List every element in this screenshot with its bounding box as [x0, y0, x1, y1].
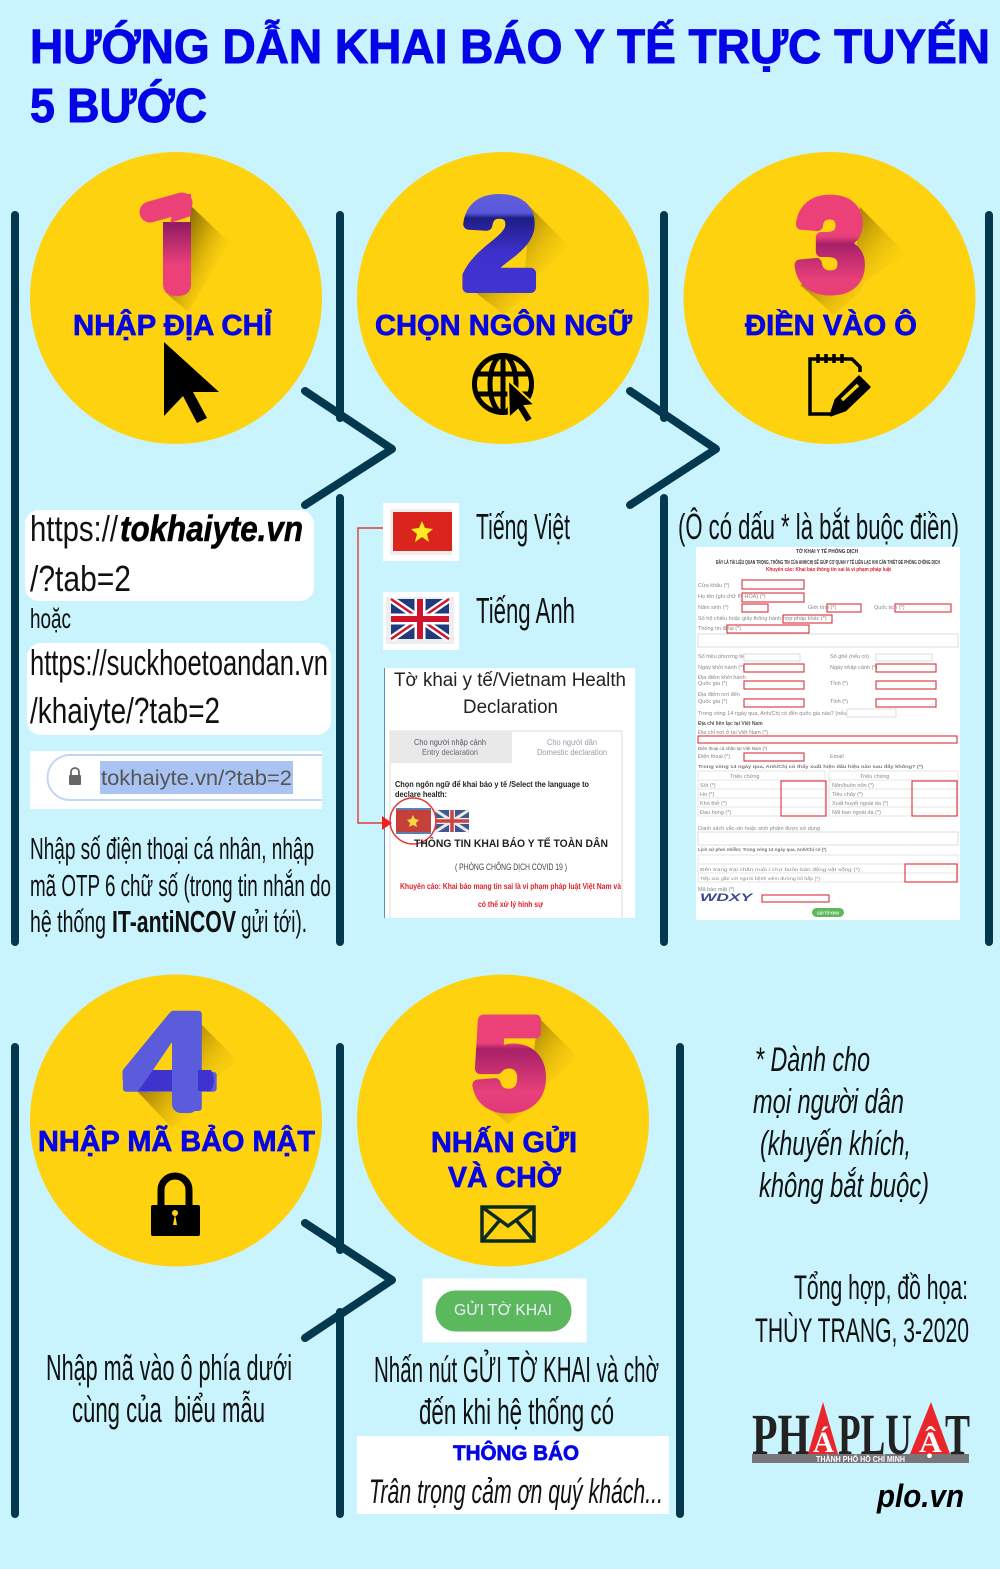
screenshot: language selection: THÔNG TIN KHAI BÁO Y TẾ TOÀN DÂN: [414, 837, 608, 850]
screenshot: language selection: declare health:: [395, 789, 447, 799]
screenshot: declaration form: Giới tính (*): [808, 605, 837, 611]
instruction text: đến khi hệ thống có: [419, 1391, 614, 1432]
step 2 badge: [357, 152, 649, 444]
instruction text: [30, 831, 331, 939]
screenshot: declaration form: Địa chỉ nơi ở tại Việt Nam (*): [698, 729, 768, 736]
screenshot: declaration form: Đau họng (*): [700, 810, 731, 816]
screenshot: declaration form: Năm sinh (*): [698, 605, 729, 611]
screenshot: language selection: Khuyến cáo: Khai báo mang tin sai là vi phạm pháp luật Việt Nam và: [400, 881, 621, 891]
url box 2: [27, 642, 331, 735]
url box 2: /khaiyte/?tab=2: [30, 690, 220, 731]
credit: [755, 1269, 969, 1350]
screenshot: declaration form: [696, 547, 960, 920]
screenshot: declaration form: Trong vòng 14 ngày qua, Anh/Chị có đến quốc gia nào? (nếu có ghi rõ): [698, 711, 871, 717]
screenshot: declaration form: Địa điểm khởi hành: [698, 674, 746, 681]
screenshot: declaration form: Mã bảo mật (*): [698, 887, 735, 893]
instruction text: hệ thống: [30, 904, 106, 939]
screenshot: declaration form: Trong vòng 14 ngày qua, Anh/Chị có thấy xuất hiện dấu hiệu nào sau đây không? (*): [698, 763, 924, 769]
screenshot: declaration form: Điện thoại cá nhân tại Việt Nam (*): [698, 746, 768, 751]
screenshot: declaration form: TỜ KHAI Y TẾ PHÒNG DỊCH: [796, 547, 858, 555]
screenshot: declaration form: Số hiệu phương tiện: [698, 654, 748, 660]
screenshot: declaration form: Ngày khởi hành (*): [698, 664, 744, 671]
icon: padlock: [151, 1176, 200, 1236]
digit 1: [140, 192, 192, 296]
heading: nhập địa chỉ: NHẬP ĐỊA CHỈ: [73, 308, 272, 342]
logo: pháp luật: Á: [813, 1426, 834, 1459]
notice box: THÔNG BÁO: [453, 1441, 579, 1465]
browser address bar: tokhaiyte.vn/?tab=2: [101, 767, 292, 790]
url box 1: /?tab=2: [30, 558, 131, 599]
logo: pháp luật: PLU: [838, 1402, 912, 1467]
screenshot: declaration form: Số ghế (nếu có): [830, 654, 869, 660]
icon: globe with cursor: [474, 356, 535, 423]
button: gửi tờ khai: [422, 1278, 586, 1342]
browser address bar: [30, 751, 322, 809]
instruction text: gửi tới).: [241, 904, 307, 939]
screenshot: declaration form: Tỉnh (*): [830, 698, 848, 705]
screenshot: declaration form: Quốc gia (*): [698, 699, 728, 705]
digit 4: 4: [124, 985, 214, 1138]
screenshot: language selection: Chọn ngôn ngữ để khai báo y tế /Select the language to: [395, 779, 589, 789]
panel: step 2 language choice: [358, 503, 635, 918]
screenshot: declaration form: Email: [830, 754, 844, 760]
instruction text: Nhấn nút GỬI TỜ KHAI và chờ: [374, 1348, 659, 1390]
note: audience: không bắt buộc): [759, 1167, 929, 1205]
label: tiếng việt: Tiếng Việt: [476, 506, 570, 547]
logo: pháp luật: [752, 1402, 970, 1467]
screenshot: declaration form: Cửa khẩu (*): [698, 582, 730, 589]
screenshot: declaration form: Nổi ban ngoài da (*): [832, 809, 881, 816]
step 5 badge: [357, 974, 649, 1266]
panel: step 3 form: [678, 506, 960, 920]
note: audience: * Dành cho: [755, 1041, 870, 1079]
heading: điền vào ô: ĐIỀN VÀO Ô: [745, 308, 917, 342]
screenshot: declaration form: Sốt (*): [700, 783, 716, 789]
digit 2: 2: [464, 174, 536, 314]
instruction text: Nhập số điện thoại cá nhân, nhập: [30, 831, 314, 866]
screenshot: declaration form: Quốc gia (*): [698, 681, 728, 687]
screenshot: declaration form: Khó thở (*): [700, 800, 727, 807]
digit 1: 1: [131, 168, 203, 321]
panel: step 5 instructions: [357, 1278, 669, 1514]
url box 1: tokhaiyte.vn: [120, 508, 303, 549]
notice box: Trân trọng cảm ơn quý khách...: [369, 1473, 663, 1511]
icon: notepad and pencil: [810, 354, 869, 415]
flag: UK: [383, 592, 459, 650]
step 3 badge: [684, 152, 976, 444]
heading: nhấn gửi và chờ: VÀ CHỜ: [448, 1160, 561, 1194]
step 4 badge: [30, 974, 322, 1266]
screenshot: declaration form: Số hộ chiếu hoặc giấy thông hành hợp pháp khác (*): [698, 616, 827, 622]
title: [30, 19, 990, 133]
panel: step 4 instructions: cùng của biểu mẫu: [72, 1389, 265, 1430]
screenshot: declaration form: Điện thoại (*): [698, 754, 730, 760]
note: audience: [753, 1041, 929, 1205]
screenshot: declaration form: Triệu chứng: [730, 774, 759, 780]
panel: step 1 instructions: [25, 508, 331, 939]
logo: pháp luật: PH: [752, 1402, 810, 1467]
screenshot: language selection: Cho người dân: [547, 738, 597, 747]
screenshot: declaration form: Tiêu chảy (*): [832, 792, 863, 798]
screenshot: declaration form: Ho (*): [700, 792, 715, 798]
screenshot: language selection: Tờ khai y tế/Vietnam Health: [394, 670, 626, 691]
screenshot: language selection: Domestic declaration: [537, 748, 607, 757]
screenshot: declaration form: Địa điểm nơi đến: [698, 691, 740, 698]
screenshot: declaration form: Nôn/buồn nôn (*): [832, 783, 874, 789]
logo: pháp luật: T: [945, 1402, 970, 1467]
screenshot: declaration form: Triệu chứng: [860, 774, 889, 780]
screenshot: declaration form: Tỉnh (*): [830, 680, 848, 687]
flag: Vietnam: [383, 503, 459, 561]
icon: cursor: [164, 342, 219, 423]
screenshot: declaration form: Xuất huyết ngoài da (*): [832, 801, 888, 807]
arrow: step 1 to 2: [305, 391, 392, 505]
logo: pháp luật: Ậ: [919, 1426, 942, 1459]
url box 2: https://suckhoetoandan.vn: [30, 642, 328, 683]
instruction text: [374, 1348, 659, 1432]
screenshot: declaration form: Thông tin đi lại (*): [698, 626, 741, 632]
screenshot: language selection: [382, 668, 635, 918]
screenshot: language selection: Declaration: [463, 697, 558, 718]
heading: chọn ngôn ngữ: CHỌN NGÔN NGỮ: [375, 308, 633, 342]
screenshot: declaration form: Ngày nhập cảnh (*): [830, 665, 878, 671]
note: audience: (khuyến khích,: [760, 1125, 911, 1163]
step 1 badge: [30, 152, 322, 444]
heading: nhấn gửi và chờ: NHẤN GỬI: [431, 1125, 577, 1159]
digit 5: 5: [474, 993, 544, 1134]
digit 3: 3: [797, 174, 864, 316]
screenshot: declaration form: Địa chỉ liên lạc tại Việt Nam: [698, 721, 763, 727]
button: gửi tờ khai: GỬI TỜ KHAI: [454, 1301, 552, 1319]
icon: envelope: [482, 1207, 534, 1241]
screenshot: declaration form: Họ tên (ghi chữ IN HOA) (*): [698, 594, 766, 600]
label: hoặc: hoặc: [30, 603, 71, 634]
screenshot: declaration form: Lịch sử phơi nhiễm: Trong vòng 14 ngày qua, Anh/Chị có (*): [698, 846, 827, 852]
screenshot: language selection: Entry declaration: [422, 748, 478, 757]
screenshot: declaration form: Khuyến cáo: Khai báo thông tin sai là vi phạm pháp luật: [766, 566, 891, 573]
note: audience: mọi người dân: [753, 1083, 904, 1121]
title: 5 BƯỚC: [30, 78, 207, 133]
heading: nhấn gửi và chờ: [431, 1125, 577, 1194]
panel: step 4 instructions: Nhập mã vào ô phía dưới: [46, 1347, 292, 1388]
screenshot: declaration form: Tiếp xúc gần với người bệnh viêm đường hô hấp (*): [700, 876, 821, 881]
heading: nhập mã bảo mật: NHẬP MÃ BẢO MẬT: [38, 1124, 315, 1158]
url box 1: [25, 508, 314, 601]
notice box: [357, 1436, 669, 1514]
logo: pháp luật: THÀNH PHỐ HỒ CHÍ MINH: [816, 1454, 905, 1464]
instruction text: IT-antiNCOV: [112, 904, 236, 939]
arrow: step 4 to 5: [305, 1223, 392, 1338]
screenshot: language selection: có thể xử lý hình sự: [478, 899, 544, 909]
arrow: step 2 to 3: [630, 391, 716, 505]
screenshot: declaration form: Đến trang trại chăn nuôi / chợ buôn bán động vật sống (*): [700, 867, 861, 872]
website: plo.vn: plo.vn: [876, 1478, 964, 1514]
url box 1: https://: [30, 508, 118, 549]
panel: step 4 instructions: [46, 1347, 292, 1430]
screenshot: language selection: Cho người nhập cảnh: [414, 738, 486, 747]
label: tiếng anh: Tiếng Anh: [476, 590, 575, 631]
connector arrow: [358, 528, 385, 823]
screenshot: declaration form: GỬI TỜ KHAI: [817, 908, 839, 916]
screenshot: declaration form: Danh sách vắc-xin hoặc sinh phẩm được sử dụng: [698, 825, 820, 832]
screenshot: declaration form: Quốc tịch (*): [874, 605, 905, 611]
screenshot: language selection: ( PHÒNG CHỐNG DỊCH COVID 19 ): [455, 861, 567, 872]
instruction text: mã OTP 6 chữ số (trong tin nhắn do: [30, 868, 331, 903]
screenshot: declaration form: WDXY: [700, 892, 755, 904]
